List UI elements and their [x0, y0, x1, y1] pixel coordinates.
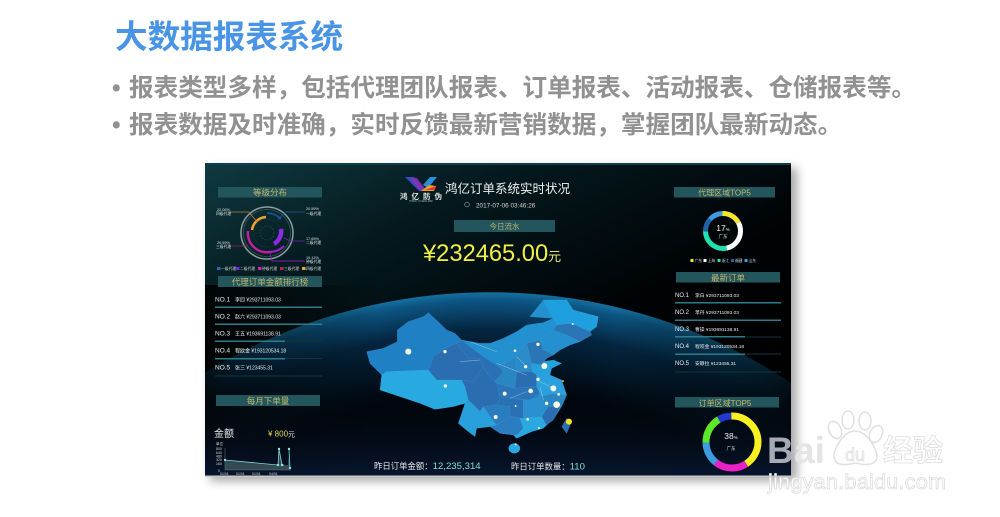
map of China [367, 300, 598, 453]
header: today's revenue: 今日流水 [490, 221, 520, 231]
legend: level distribution: 四级代理 [306, 266, 321, 271]
donut: order region: 广东 [726, 445, 736, 452]
chart labels: 19.12% [306, 256, 320, 260]
legend: agent region: 山东 [748, 258, 756, 263]
revenue number: ¥232465.00元 [422, 241, 561, 267]
list: latest orders: NO.4 [675, 344, 690, 350]
chart: monthly orders line: 640 [216, 451, 222, 455]
right header: latest orders: 最新订单 [711, 273, 745, 283]
chart: monthly orders line [216, 441, 291, 476]
watermark: Baidu jingyan: B [767, 430, 794, 471]
bullet text 2: • [112, 112, 121, 139]
list: latest orders: 李白 ¥293711093.03 [695, 292, 739, 299]
list: agent ranking: NO.3 [215, 330, 231, 338]
donut: agent region [706, 214, 740, 248]
chart: monthly orders line: 0 [218, 469, 220, 473]
legend: agent region: 上海 [708, 258, 715, 263]
list: latest orders: 曹操 ¥193691138.91 [695, 326, 739, 333]
logo: HONG YI FANG WEI [409, 200, 433, 203]
legend: agent region [690, 258, 756, 263]
list: latest orders: NO.2 [675, 310, 690, 316]
list: agent ranking: 程欧金 ¥193120534.18 [235, 348, 286, 354]
donut: agent region: 17% [716, 223, 730, 233]
chart: monthly orders line: 800 [216, 447, 222, 451]
list: latest orders: NO.1 [675, 293, 690, 299]
chart labels [216, 207, 321, 264]
yesterday order amount: 昨日订单金额：12,235,314 [374, 461, 481, 472]
chart: monthly orders line: 01/01 [220, 472, 229, 476]
donut: order region: 38% [724, 431, 738, 441]
dashboard shadow [210, 168, 797, 481]
left header: agent ranking [218, 276, 322, 287]
left header: agent ranking: 代理订单金额排行榜 [232, 277, 309, 287]
list: agent ranking: NO.4 [215, 348, 231, 354]
legend: agent region: 浙江 [722, 258, 729, 263]
date: 2017-07-06 03:46:26 [476, 202, 536, 210]
right header: order region top5: 订单区域TOP5 [699, 398, 752, 408]
chart: monthly orders line: 320 [216, 458, 222, 462]
logo [400, 177, 442, 203]
right header: agent region top5: 代理区域TOP5 [698, 188, 751, 198]
chart labels: 一级代理 [306, 211, 321, 216]
list: latest orders: NO.5 [675, 361, 690, 367]
list: agent ranking [215, 296, 322, 376]
watermark: Baidu jingyan: 经验 [883, 435, 943, 468]
legend: level distribution: 二级代理 [240, 266, 255, 271]
list: latest orders [675, 292, 781, 372]
left header: level distribution: 等级分布 [253, 188, 287, 198]
chart labels: 钟级代理 [306, 259, 321, 264]
chart: monthly orders line: 01/01 [252, 472, 261, 476]
chart: monthly orders line: 480 [216, 454, 222, 458]
monthly amount label [214, 427, 295, 440]
watermark: Baidu jingyan: du [845, 445, 865, 465]
chart: monthly orders line: 单位 [216, 441, 223, 446]
left header: monthly orders [216, 395, 320, 406]
chart labels: 20.59% [306, 207, 320, 211]
clock icon [465, 202, 469, 207]
logo: 鸿亿防伪 [400, 191, 442, 201]
chart labels: 三级代理 [216, 244, 231, 249]
list: latest orders: 苹丹 ¥293711093.03 [695, 309, 739, 316]
chart: level distribution radial rings [230, 207, 305, 261]
title: 大数据报表系统 [115, 18, 343, 55]
monthly amount label: 金额 [214, 427, 234, 440]
panel: dashboard screenshot [205, 163, 791, 477]
list: agent ranking: 王五 ¥193691138.91 [235, 332, 281, 338]
right header: latest orders [676, 272, 780, 283]
chart: monthly orders line: 160 [216, 462, 222, 466]
left header: monthly orders: 每月下单量 [247, 396, 290, 406]
watermark: Baidu jingyan [767, 411, 946, 494]
list: agent ranking: 张三 ¥123455.31 [235, 364, 273, 372]
dashboard title: 鸿亿订单系统实时状况 [445, 181, 571, 196]
chart labels: 22.06% [217, 208, 231, 212]
list: agent ranking: NO.1 [215, 296, 231, 304]
right header: order region top5 [675, 397, 779, 408]
bullet text 2: 报表数据及时准确，实时反馈最新营销数据，掌握团队最新动态。 [129, 112, 842, 139]
watermark: Baidu jingyan: jingyan.baidu.com [767, 470, 946, 494]
chart labels: 四级代理 [216, 211, 231, 216]
yesterday order count: 昨日订单数量：110 [511, 462, 585, 472]
chart labels: 二级代理 [306, 240, 321, 245]
watermark: Baidu jingyan: ai [794, 430, 825, 471]
left header: level distribution [218, 187, 322, 198]
chart labels: 20.59% [217, 241, 231, 245]
list: latest orders: 程咬金 ¥193120534.18 [695, 343, 744, 350]
legend: level distribution [217, 266, 321, 271]
list: latest orders: 安颖拉 ¥123455.31 [695, 360, 736, 367]
right header: agent region top5 [674, 187, 775, 198]
legend: level distribution: 钟级代理 [262, 266, 277, 271]
legend: level distribution: 三级代理 [284, 266, 299, 271]
bullet text 1: 报表类型多样，包括代理团队报表、订单报表、活动报表、仓储报表等。 [129, 75, 916, 102]
legend: level distribution: 一级代理 [221, 266, 236, 271]
legend: agent region: 福建 [735, 258, 743, 263]
chart: monthly orders line: 04/01 [269, 472, 278, 476]
list: agent ranking: NO.5 [215, 364, 231, 372]
list: agent ranking: 李四 ¥293711093.03 [235, 296, 281, 304]
chart: monthly orders line: 01/01 [236, 472, 245, 476]
donut: order region [706, 416, 758, 468]
bullet text 1: • [112, 75, 121, 102]
list: agent ranking: NO.2 [215, 314, 231, 320]
monthly amount label: ¥ 800元 [267, 430, 295, 438]
list: latest orders: NO.3 [675, 327, 690, 333]
header: today's revenue [454, 220, 555, 232]
list: agent ranking: 赵六 ¥293711093.03 [235, 314, 281, 320]
legend: agent region: 广东 [694, 258, 702, 263]
donut: agent region: 广东 [718, 233, 728, 240]
chart labels: 17.65% [306, 237, 320, 241]
